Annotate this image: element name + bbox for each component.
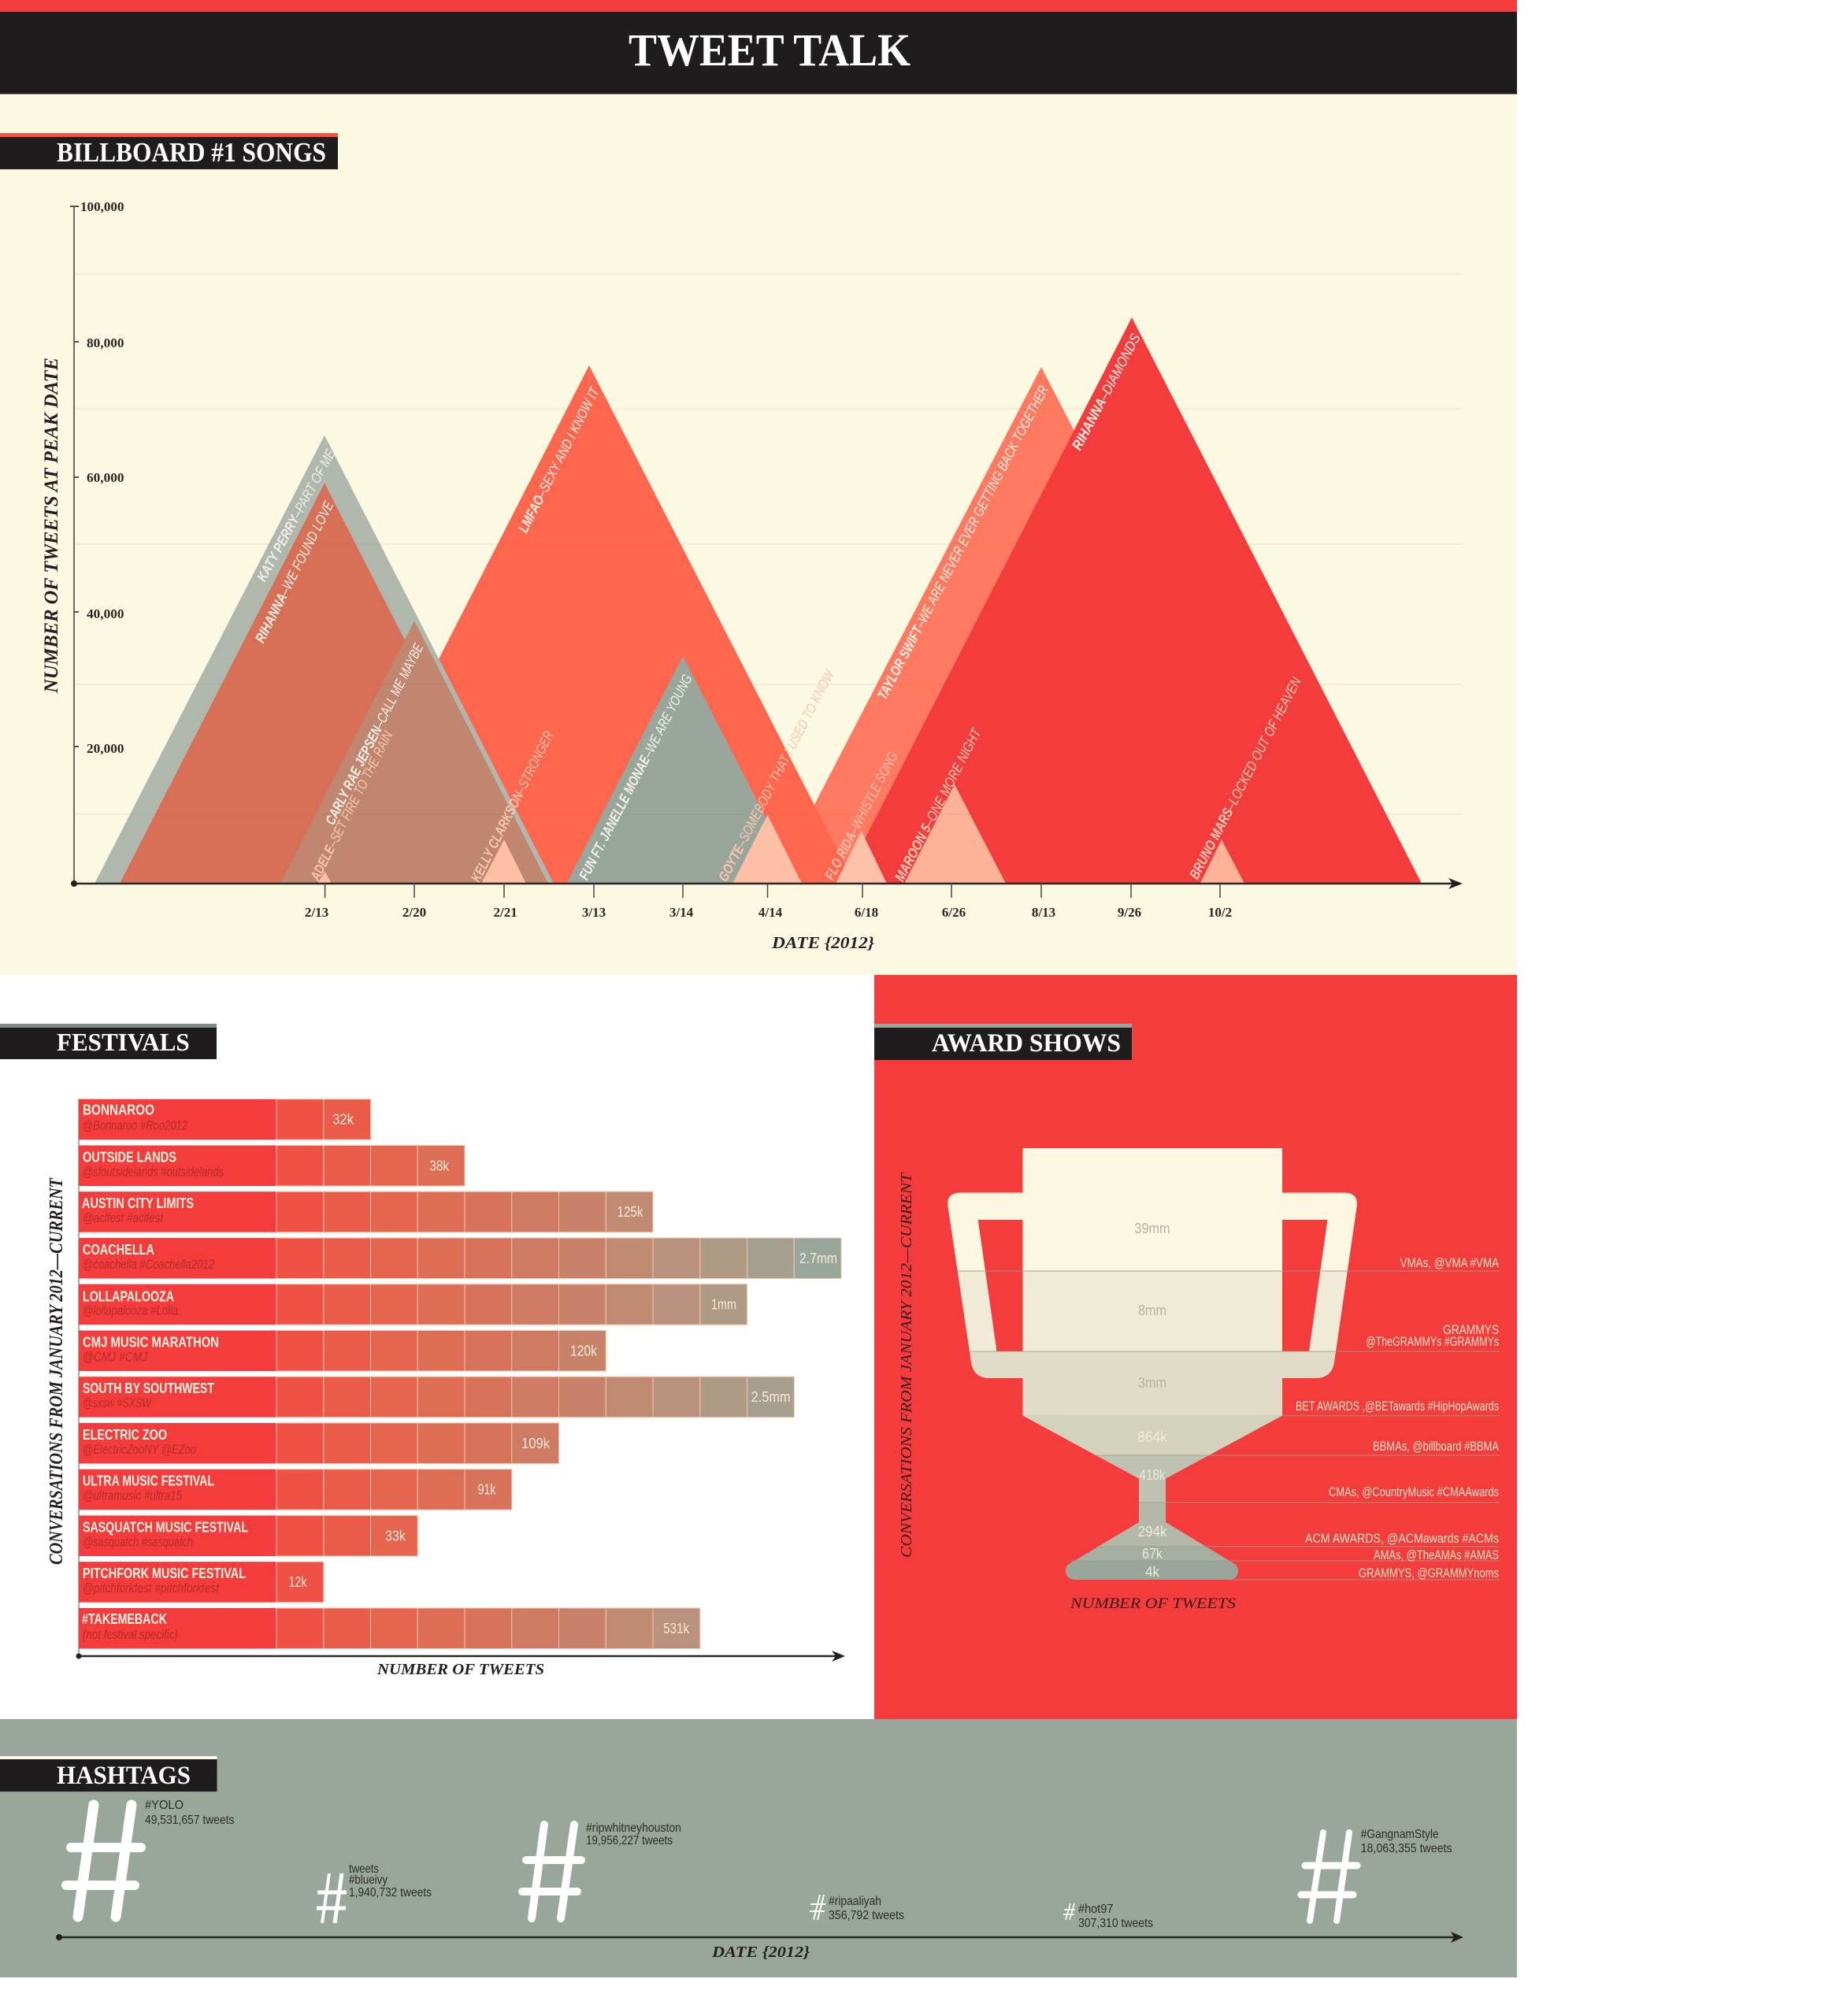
bar: takemeback xyxy=(79,1608,700,1649)
song labels: CARLY RAE JEPSEN–CALL ME MAYBE xyxy=(322,640,427,827)
song labels: TAYLOR SWIFT–WE ARE NEVER EVER GETTING BACK TOGETHER xyxy=(874,383,1051,702)
festivals y axis title: CONVERSATIONS FROM JANUARY 2012—CURRENT xyxy=(46,1177,67,1565)
trophy values: 864k xyxy=(1137,1429,1168,1445)
trophy values: 418k xyxy=(1139,1467,1166,1483)
x axis: 2/13 xyxy=(305,905,328,920)
triangle: maroon 5 xyxy=(904,784,1006,884)
bar: south by southwest: 2.5mm xyxy=(751,1389,791,1405)
title: TWEET TALK xyxy=(629,24,911,76)
triangle: bruno mars xyxy=(1200,839,1244,884)
award show labels: @TheGRAMMYs #GRAMMYs xyxy=(1366,1334,1499,1349)
song labels: KATY PERRY–PART OF ME xyxy=(254,446,339,584)
bar: coachella: COACHELLA xyxy=(83,1242,154,1258)
bar: cmj music marathon: 120k xyxy=(570,1343,598,1359)
heading: festivals xyxy=(0,1024,217,1059)
y axis xyxy=(70,199,124,884)
song labels xyxy=(252,332,1304,884)
x axis: 4/14 xyxy=(758,905,783,920)
triangle: carly rae jepsen xyxy=(280,621,548,884)
heading: award shows xyxy=(874,1024,1132,1060)
x axis: 2/21 xyxy=(493,905,517,920)
hashtag: ripaaliyah xyxy=(810,1895,904,1922)
bar: lollapalooza xyxy=(79,1284,747,1325)
bar: pitchfork music festival: PITCHFORK MUSIC FESTIVAL xyxy=(83,1566,246,1581)
x axis: 3/13 xyxy=(582,905,606,920)
triangle: rihanna diamonds xyxy=(842,317,1422,884)
bar: pitchfork music festival xyxy=(79,1562,324,1603)
hashtag: yolo: #YOLO xyxy=(145,1799,184,1812)
bar: cmj music marathon: @CMJ #CMJ xyxy=(83,1350,147,1364)
y axis: 80,000 xyxy=(87,335,124,350)
bar: cmj music marathon: CMJ MUSIC MARATHON xyxy=(83,1334,219,1350)
x axis: 9/26 xyxy=(1118,905,1141,920)
triangle: taylor swift xyxy=(773,367,1309,884)
trophy values xyxy=(1134,1221,1170,1580)
bar: coachella: @coachella #Coachella2012 xyxy=(83,1257,214,1272)
bar: cmj music marathon xyxy=(79,1331,606,1371)
award show labels: BET AWARDS ,@BETawards #HipHopAwards xyxy=(1296,1399,1499,1414)
song labels: ADELE–SET FIRE TO THE RAIN xyxy=(307,728,396,884)
trophy values: 39mm xyxy=(1134,1221,1170,1236)
heading: festivals: FESTIVALS xyxy=(57,1028,190,1056)
hashtag: hot97: #hot97 xyxy=(1078,1903,1114,1916)
song labels: FUN FT. JANELLE MONAE–WE ARE YOUNG xyxy=(576,672,695,883)
bar: lollapalooza: 1mm xyxy=(711,1297,736,1313)
song labels: LMFAO–SEXY AND I KNOW IT xyxy=(515,384,603,536)
festivals x axis title: NUMBER OF TWEETS xyxy=(376,1661,544,1678)
song labels: BRUNO MARS–LOCKED OUT OF HEAVEN xyxy=(1186,674,1304,882)
bar: south by southwest: @sxsw #SXSW xyxy=(83,1395,152,1410)
hashtag: hot97: 307,310 tweets xyxy=(1078,1917,1153,1930)
hashtag: blueivy: #blueivy xyxy=(349,1873,388,1887)
trophy values: 8mm xyxy=(1138,1303,1166,1318)
hashtag: ripaaliyah: #ripaaliyah xyxy=(829,1895,881,1908)
panel: hashtags xyxy=(0,1719,1517,1977)
trophy chart xyxy=(937,1142,1500,1581)
bar: pitchfork music festival: 12k xyxy=(288,1574,307,1590)
trophy shape xyxy=(937,1142,1370,1580)
heading: billboard xyxy=(0,133,338,169)
hashtag: ripwhitneyhouston: 19,956,227 tweets xyxy=(586,1834,673,1847)
bar: austin city limits xyxy=(79,1191,653,1232)
award show labels xyxy=(1296,1255,1500,1581)
hashtag: gangnamstyle: #GangnamStyle xyxy=(1361,1828,1439,1841)
award show labels: VMAs, @VMA #VMA xyxy=(1400,1255,1500,1270)
award show labels: GRAMMYS xyxy=(1443,1322,1499,1337)
bar: electric zoo xyxy=(79,1423,559,1463)
triangle chart xyxy=(41,199,1463,952)
trophy values: 67k xyxy=(1142,1546,1163,1562)
bar: austin city limits: AUSTIN CITY LIMITS xyxy=(82,1195,194,1211)
y axis: 20,000 xyxy=(87,741,124,756)
hashtag: ripwhitneyhouston: #ripwhitneyhouston xyxy=(586,1821,681,1835)
x axis xyxy=(71,878,1463,920)
triangle: rihanna we found love xyxy=(120,484,529,884)
triangle: kelly clarkson xyxy=(481,839,526,884)
bar: outside lands: 38k xyxy=(429,1158,450,1173)
trophy values: 4k xyxy=(1145,1564,1160,1580)
hashtag: ripwhitneyhouston xyxy=(522,1821,681,1918)
triangle: lmfao xyxy=(324,365,855,884)
song labels: MAROON 5–ONE MORE NIGHT xyxy=(892,724,985,884)
song labels: GOYTE–SOMEBODY THAT I USED TO KNOW xyxy=(715,666,838,884)
bar: ultra music festival: 91k xyxy=(477,1482,496,1498)
triangle: adele xyxy=(317,871,332,884)
bar: takemeback: #TAKEMEBACK xyxy=(82,1611,167,1627)
song labels: FLO RIDA–WHISTLE SONG xyxy=(822,750,901,883)
y axis: 40,000 xyxy=(87,606,124,621)
heading: award shows: AWARD SHOWS xyxy=(932,1029,1121,1058)
bar: coachella: 2.7mm xyxy=(799,1251,837,1266)
song labels: KELLY CLARKSON–STRONGER xyxy=(468,728,557,884)
bar: ultra music festival: ULTRA MUSIC FESTIVAL xyxy=(83,1473,214,1489)
award y axis title: CONVERSATIONS FROM JANUARY 2012—CURRENT xyxy=(898,1172,915,1558)
hashtags x axis xyxy=(56,1932,1463,1943)
bar: austin city limits: 125k xyxy=(618,1204,643,1220)
hashtag: ripaaliyah: 356,792 tweets xyxy=(829,1909,904,1922)
triangle: katy perry xyxy=(95,435,554,884)
bar: electric zoo: @ElectricZooNY @EZoo xyxy=(83,1442,196,1457)
award show labels: AMAs, @TheAMAs #AMAS xyxy=(1374,1547,1499,1562)
triangle: goyte xyxy=(732,815,802,884)
bar: outside lands xyxy=(79,1145,465,1186)
bar: sasquatch music festival: 33k xyxy=(385,1528,406,1544)
x axis: 8/13 xyxy=(1032,905,1055,920)
award show labels: CMAs, @CountryMusic #CMAAwards xyxy=(1329,1484,1499,1499)
heading: hashtags xyxy=(0,1756,217,1792)
song labels: RIHANNA–DIAMONDS xyxy=(1069,332,1144,453)
bar: takemeback: 531k xyxy=(663,1621,690,1636)
bar: sasquatch music festival xyxy=(79,1515,417,1556)
bar: takemeback: (not festival specific) xyxy=(83,1627,178,1642)
bar: electric zoo: 109k xyxy=(521,1436,551,1451)
song labels: RIHANNA–WE FOUND LOVE xyxy=(252,498,337,646)
bar chart xyxy=(79,1099,841,1649)
hashtag: blueivy: 1,940,732 tweets xyxy=(349,1886,432,1899)
hashtag: yolo xyxy=(66,1799,235,1917)
panel: billboard #1 songs xyxy=(0,94,1517,975)
bar: austin city limits: @aclfest #aclfest xyxy=(83,1210,164,1225)
bar: ultra music festival: @ultramusic #ultra15 xyxy=(83,1488,182,1503)
festivals x axis xyxy=(76,1651,845,1662)
bar: bonnaroo xyxy=(79,1099,370,1140)
award show labels: BBMAs, @billboard #BBMA xyxy=(1373,1439,1499,1454)
bar: lollapalooza: @lollapalooza #Lolla xyxy=(83,1303,178,1318)
heading: hashtags: HASHTAGS xyxy=(57,1762,191,1790)
hashtag: gangnamstyle xyxy=(1301,1828,1452,1921)
bar: bonnaroo: 32k xyxy=(332,1112,354,1128)
y axis: 100,000 xyxy=(80,199,124,214)
header band xyxy=(0,0,1517,94)
trophy values: 294k xyxy=(1137,1524,1167,1540)
panel: award shows xyxy=(874,975,1517,1719)
bar: outside lands: OUTSIDE LANDS xyxy=(83,1150,176,1166)
x axis title: DATE {2012} xyxy=(771,933,875,952)
bar: south by southwest xyxy=(79,1377,794,1418)
triangle: fun xyxy=(566,656,799,884)
bar: sasquatch music festival: SASQUATCH MUSIC FESTIVAL xyxy=(83,1520,248,1536)
heading: billboard: BILLBOARD #1 SONGS xyxy=(57,137,326,168)
panel: festivals xyxy=(0,975,874,1719)
award show labels: GRAMMYS, @GRAMMYnoms xyxy=(1359,1566,1499,1581)
x axis: 2/20 xyxy=(402,905,426,920)
bar: coachella xyxy=(79,1238,841,1279)
x axis: 6/26 xyxy=(942,905,966,920)
x axis: 10/2 xyxy=(1208,905,1232,920)
bar: bonnaroo: BONNAROO xyxy=(83,1102,154,1118)
bar: ultra music festival xyxy=(79,1469,512,1510)
award x axis title: NUMBER OF TWEETS xyxy=(1070,1595,1237,1612)
y axis: 60,000 xyxy=(87,470,124,485)
triangle: flo rida xyxy=(836,831,887,884)
hashtags x axis title: DATE {2012} xyxy=(711,1944,810,1961)
hashtag: hot97 xyxy=(1063,1903,1153,1930)
x axis: 3/14 xyxy=(669,905,694,920)
hashtag: gangnamstyle: 18,063,355 tweets xyxy=(1361,1842,1452,1855)
hashtag: yolo: 49,531,657 tweets xyxy=(145,1814,235,1827)
x axis: 6/18 xyxy=(855,905,878,920)
award show labels: ACM AWARDS, @ACMawards #ACMs xyxy=(1305,1531,1499,1546)
trophy values: 3mm xyxy=(1138,1375,1166,1391)
bar: pitchfork music festival: @pitchforkfest #pitchforkfest xyxy=(83,1581,220,1595)
bar: bonnaroo: @Bonnaroo #Roo2012 xyxy=(83,1118,187,1133)
hashtag: blueivy: tweets xyxy=(349,1862,379,1876)
bar: sasquatch music festival: @sasquatch #sasquatch xyxy=(83,1534,193,1550)
bar: electric zoo: ELECTRIC ZOO xyxy=(83,1427,167,1443)
bar: south by southwest: SOUTH BY SOUTHWEST xyxy=(83,1380,214,1396)
hashtag: blueivy xyxy=(317,1862,432,1923)
bar: outside lands: @sfoutsidelands #outsidelands xyxy=(83,1164,224,1180)
bar: lollapalooza: LOLLAPALOOZA xyxy=(83,1289,174,1305)
festivals y axis line xyxy=(78,1099,80,1656)
y axis title: NUMBER OF TWEETS AT PEAK DATE xyxy=(41,358,62,694)
